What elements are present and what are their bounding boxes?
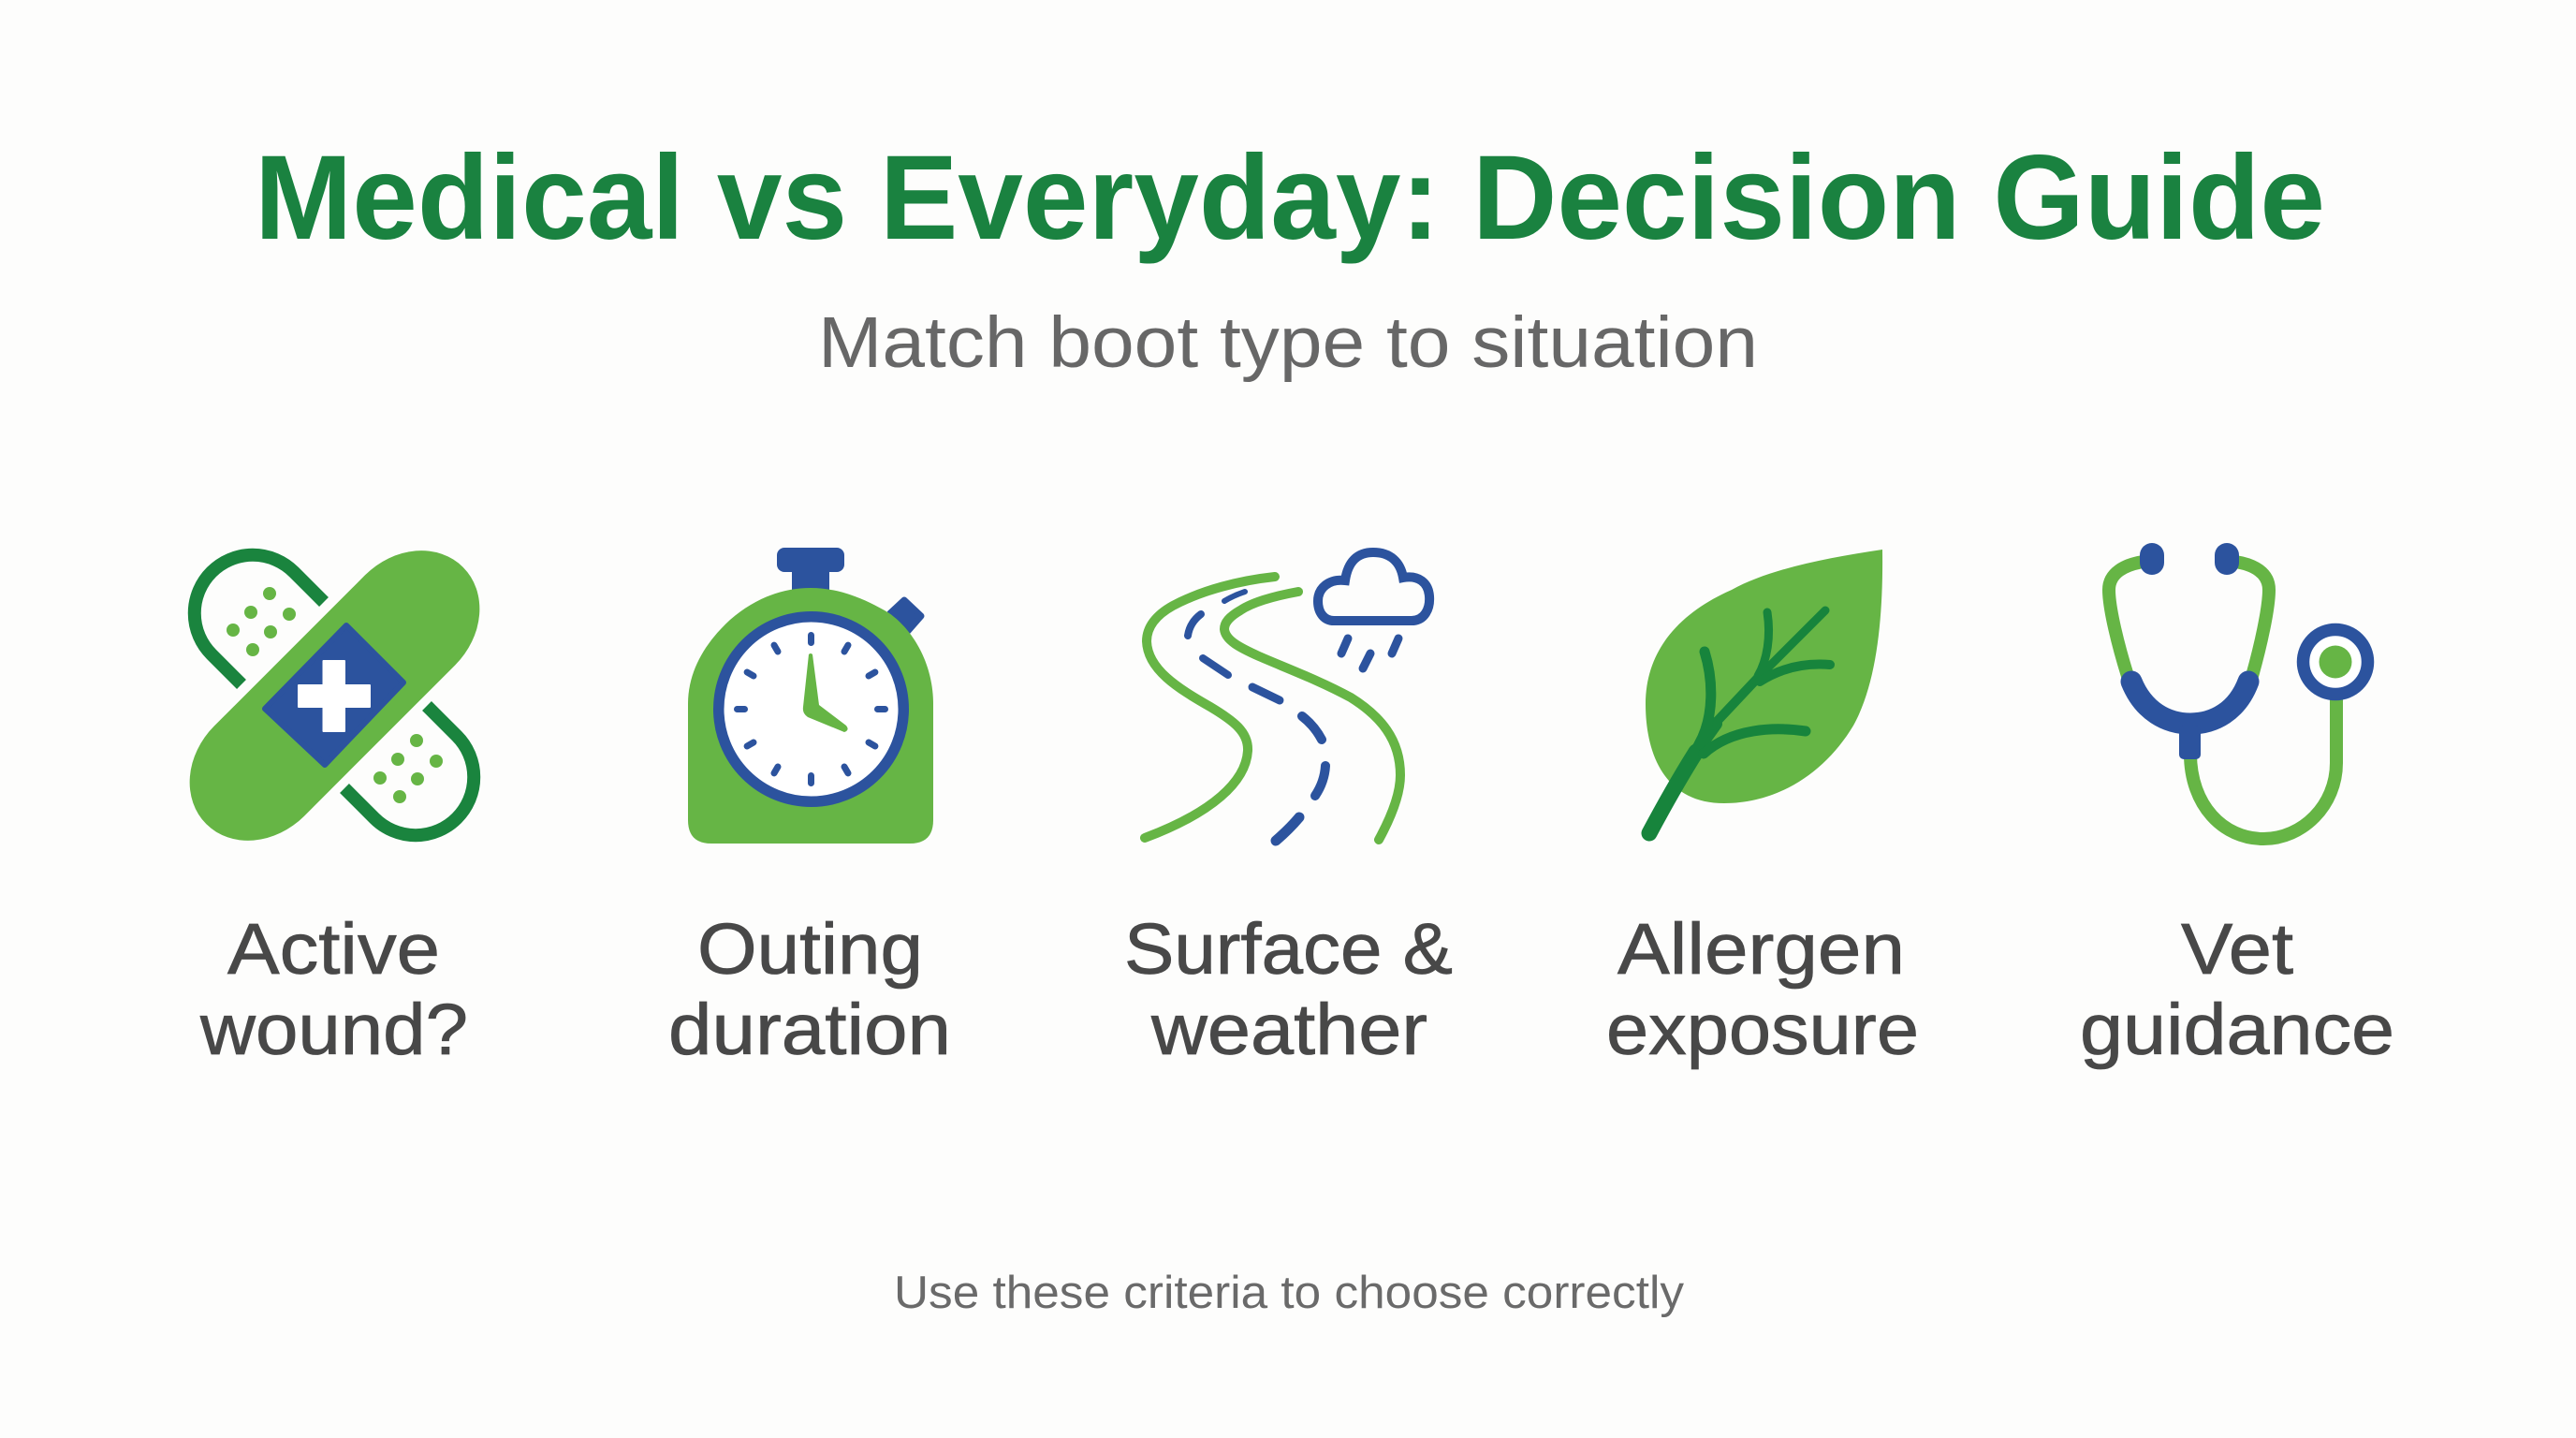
panel: allergen exposure [1606,550,1919,1070]
icon: stethoscope [2109,543,2368,839]
label: active wound: wound? [199,990,468,1070]
label: allergen exposure [1606,909,1919,1070]
footer note: Use these criteria to choose correctly [894,1268,1685,1318]
label: allergen exposure: exposure [1606,990,1919,1070]
panel: active wound [161,522,508,1070]
label: vet guidance: Vet [2181,909,2293,990]
label: vet guidance [2080,909,2394,1070]
label: surface and weather [1124,909,1453,1070]
title: Medical vs Everyday: Decision Guide [255,131,2325,265]
label: vet guidance: guidance [2080,990,2394,1070]
icon: winding road [1145,577,1400,841]
icon: leaf [1646,550,1882,833]
subtitle: Match boot type to situation [818,302,1758,383]
label: outing duration: duration [668,990,951,1070]
panel: vet guidance [2080,543,2394,1070]
label: surface and weather: Surface & [1124,909,1453,990]
icon: stopwatch [688,548,933,844]
label: outing duration [668,909,951,1070]
panel: outing duration [668,548,951,1070]
icon: crossed bandages [161,522,508,869]
label: allergen exposure: Allergen [1617,909,1905,990]
label: outing duration: Outing [697,909,923,990]
icon: rain cloud [1318,552,1429,668]
label: surface and weather: weather [1150,990,1427,1070]
label: active wound [199,909,468,1070]
label: active wound: Active [227,909,440,990]
panel: surface and weather [1124,552,1453,1070]
